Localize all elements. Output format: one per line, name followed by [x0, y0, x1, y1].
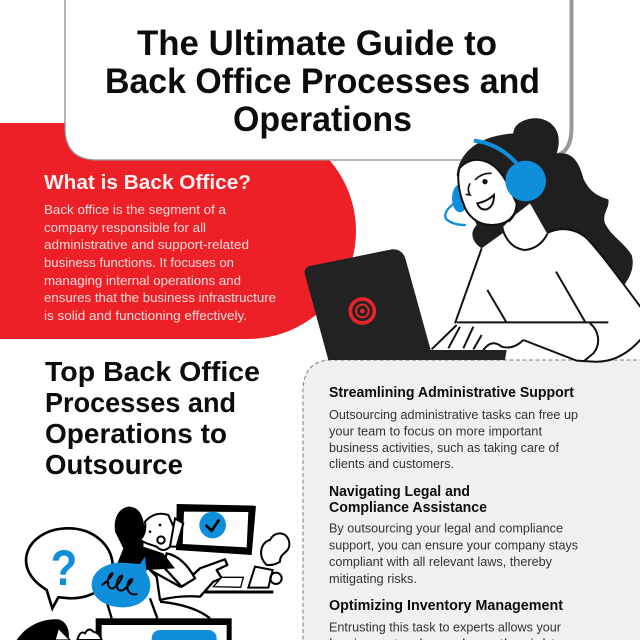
heading: top back office processes: Top Back Office	[45, 356, 260, 387]
panel: title card	[65, 0, 572, 160]
heading: top back office processes: Outsource	[45, 449, 183, 480]
heading: top back office processes: Processes and	[45, 387, 236, 418]
desk with keyboard	[205, 587, 273, 596]
woman upper arm	[163, 553, 195, 587]
neck	[503, 203, 547, 250]
text block: back office definition: company responsible for all	[44, 221, 206, 235]
laptop	[305, 249, 507, 360]
lower figure head	[17, 619, 69, 640]
monitor with check	[176, 504, 256, 555]
item: navigating legal and compliance assistance	[329, 484, 578, 586]
text block: back office definition: is solid and functioning effectively.	[44, 309, 247, 323]
hair	[457, 118, 633, 284]
illustration: stressed workers at computers	[17, 504, 289, 640]
heading: top back office processes: Operations to	[45, 418, 227, 449]
item: streamlining administrative support	[329, 385, 578, 471]
laptop logo	[350, 299, 374, 323]
torso outline	[455, 229, 640, 362]
illustration: woman with headset at laptop	[305, 118, 640, 362]
item: navigating legal and compliance assistance: mitigating risks.	[329, 572, 417, 586]
text block: back office definition: business functions. It focuses on	[44, 256, 234, 270]
text block: back office definition: administrative and support-related	[44, 238, 249, 252]
torso	[433, 229, 640, 362]
facial features	[466, 173, 492, 195]
arm and hand	[432, 323, 598, 362]
item: streamlining administrative support: clients and customers.	[329, 457, 454, 471]
item: navigating legal and compliance assistance: support, you can ensure your company stays	[329, 538, 578, 552]
item: optimizing inventory management: Optimizing Inventory Management	[329, 598, 563, 614]
headset left ear	[452, 184, 468, 212]
item: streamlining administrative support: your team to focus on more important	[329, 424, 543, 438]
question mark: ?	[51, 540, 77, 596]
text block: back office definition: Back office is the segment of a	[44, 203, 226, 217]
woman hair and top	[115, 507, 175, 570]
item: navigating legal and compliance assistance: Compliance Assistance	[329, 500, 487, 516]
blue scribble bubble	[92, 557, 150, 607]
item: navigating legal and compliance assistance: By outsourcing your legal and compliance	[329, 522, 563, 536]
text block: back office definition	[44, 203, 276, 323]
text block: back office definition: managing internal operations and	[44, 274, 241, 288]
headset band and ear cup	[474, 141, 517, 163]
lower monitor	[96, 618, 232, 640]
title: The Ultimate Guide to	[137, 24, 497, 63]
seated woman legs	[107, 598, 210, 618]
panel: outsourcing processes list	[303, 360, 640, 640]
item: streamlining administrative support: Streamlining Administrative Support	[329, 385, 574, 401]
hand at head	[170, 518, 183, 547]
woman face	[140, 514, 175, 550]
text block: back office definition: ensures that the business infrastructure	[44, 291, 276, 305]
item: navigating legal and compliance assistance: Navigating Legal and	[329, 484, 470, 500]
headset microphone	[445, 204, 465, 225]
item: streamlining administrative support: business activities, such as taking care of	[329, 441, 560, 455]
item: streamlining administrative support: Outsourcing administrative tasks can free up	[329, 408, 578, 422]
question speech bubble	[26, 528, 113, 608]
title: Back Office Processes and	[105, 62, 540, 101]
sweater lines	[457, 272, 608, 322]
face	[458, 160, 517, 225]
title	[105, 24, 540, 139]
heading: what is back office: What is Back Office?	[44, 172, 251, 194]
woman arm and hand on keyboard	[150, 559, 227, 600]
item: optimizing inventory management: Entrusting this task to experts allows your	[329, 620, 561, 634]
heading: top back office processes	[45, 356, 260, 480]
panel: red what is back office background	[0, 123, 356, 339]
item: navigating legal and compliance assistance: compliant with all relevant laws, thereby	[329, 555, 553, 569]
item: optimizing inventory management	[329, 598, 563, 640]
title: Operations	[233, 100, 412, 139]
mug with steam	[248, 533, 289, 588]
